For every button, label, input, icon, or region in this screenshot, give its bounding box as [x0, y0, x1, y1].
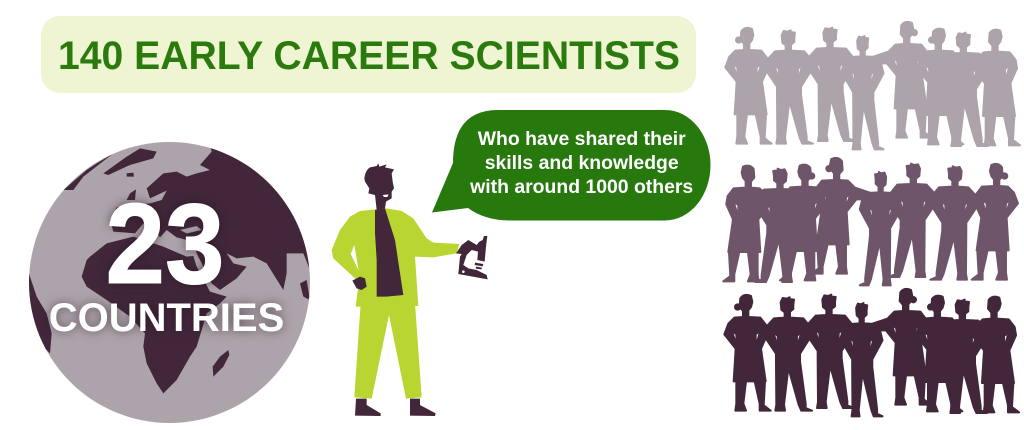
number 23: 23	[106, 181, 224, 308]
smile	[383, 194, 389, 197]
title banner	[41, 16, 696, 93]
globe with countries count	[29, 142, 310, 423]
icon: microscope	[456, 236, 488, 279]
crowd: middle row	[723, 158, 1018, 285]
label countries: COUNTRIES	[49, 296, 284, 340]
crowd: bottom row	[724, 289, 1019, 416]
head and hair	[364, 163, 394, 210]
bubble text: with around 1000 others	[469, 176, 693, 198]
continents map	[29, 148, 310, 394]
shirt	[375, 208, 403, 297]
speech bubble	[432, 110, 710, 220]
hand on hip	[352, 277, 367, 290]
trousers	[354, 303, 422, 399]
shoes	[355, 399, 436, 416]
crowd: top row	[725, 22, 1020, 149]
globe ocean	[29, 142, 310, 423]
bubble text: Who have shared their	[478, 128, 686, 150]
scientist holding microscope	[332, 163, 488, 416]
bubble text: skills and knowledge	[485, 152, 679, 174]
coat	[332, 208, 459, 307]
title text: 140 EARLY CAREER SCIENTISTS	[58, 34, 680, 78]
